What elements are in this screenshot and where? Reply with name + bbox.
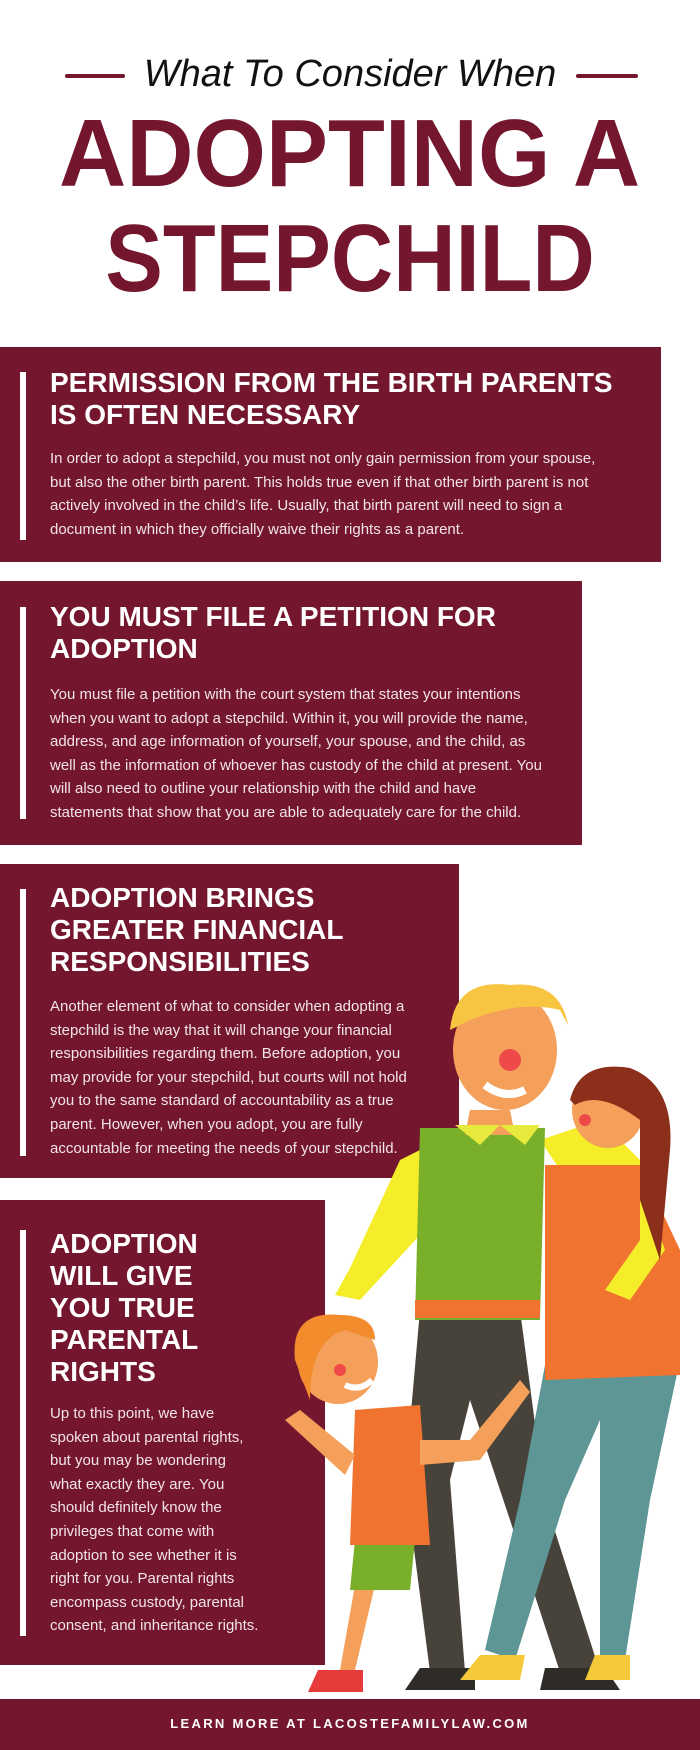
body text: adoption to see whether it is [50,1547,237,1564]
body text: Another element of what to consider when adopting a [50,998,404,1015]
subtitle with dashes: What To Consider When [144,53,556,95]
panel: petition [0,581,582,845]
body text: accountable for meeting the needs of your stepchild. [50,1140,398,1157]
body text: when you want to adopt a stepchild. Within it, you will provide the name, [50,710,528,727]
heading [50,601,496,664]
panel: financial [0,864,459,1178]
heading: RESPONSIBILITIES [50,946,310,977]
body text: will also need to outline your relationship with the child and have [50,780,476,797]
body text: but you may be wondering [50,1452,226,1469]
body text: right for you. Parental rights [50,1570,234,1587]
body text: In order to adopt a stepchild, you must not only gain permission from your spouse, [50,450,595,467]
body text: stepchild is the way that it will change your financial [50,1022,392,1039]
body text: consent, and inheritance rights. [50,1617,258,1634]
heading [50,1228,198,1387]
footer [0,1699,700,1750]
body text [50,1405,258,1634]
heading: GREATER FINANCIAL [50,914,343,945]
heading: ADOPTION [50,633,198,664]
body text: parent. However, when you adopt, you are fully [50,1116,363,1133]
body text: Up to this point, we have [50,1405,214,1422]
panel: parental rights [0,1200,325,1665]
title [59,53,641,312]
body text [50,998,407,1157]
body text: privileges that come with [50,1523,214,1540]
body text [50,686,542,821]
body text: responsibilities regarding them. Before adoption, you [50,1045,400,1062]
heading: PERMISSION FROM THE BIRTH PARENTS [50,367,613,398]
woman [460,1067,680,1680]
body text: well as the information of whoever has custody of the child at present. You [50,757,542,774]
panel: birth parents permission [0,347,661,562]
body text [50,450,595,538]
body text: address, and age information of yourself, your spouse, and the child, as [50,733,525,750]
heading: YOU TRUE [50,1292,195,1323]
heading [50,882,343,977]
footer text: LEARN MORE AT LACOSTEFAMILYLAW.COM [170,1716,530,1731]
heading: PARENTAL [50,1324,198,1355]
body text: encompass custody, parental [50,1594,244,1611]
body text: spoken about parental rights, [50,1429,243,1446]
body text: document in which they officially waive their rights as a parent. [50,521,464,538]
boy [285,1315,530,1692]
main title line 1: ADOPTING A [59,100,641,207]
body text: what exactly they are. You [50,1476,224,1493]
heading: YOU MUST FILE A PETITION FOR [50,601,496,632]
body text: statements that show that you are able to adequately care for the child. [50,804,521,821]
body text: actively involved in the child’s life. Usually, that birth parent will need to sign a [50,497,562,514]
body text: You must file a petition with the court system that states your intentions [50,686,521,703]
body text: but also the other birth parent. This holds true even if that other birth parent is not [50,474,588,491]
main title line 2: STEPCHILD [105,205,595,312]
heading: ADOPTION [50,1228,198,1259]
heading: ADOPTION BRINGS [50,882,314,913]
body text: may provide for your stepchild, but courts will not hold [50,1069,407,1086]
heading: RIGHTS [50,1356,156,1387]
heading [50,367,613,430]
body text: you to the same standard of accountability as a true [50,1092,394,1109]
man [335,984,660,1690]
heading: WILL GIVE [50,1260,193,1291]
heading: IS OFTEN NECESSARY [50,399,360,430]
body text: should definitely know the [50,1499,222,1516]
